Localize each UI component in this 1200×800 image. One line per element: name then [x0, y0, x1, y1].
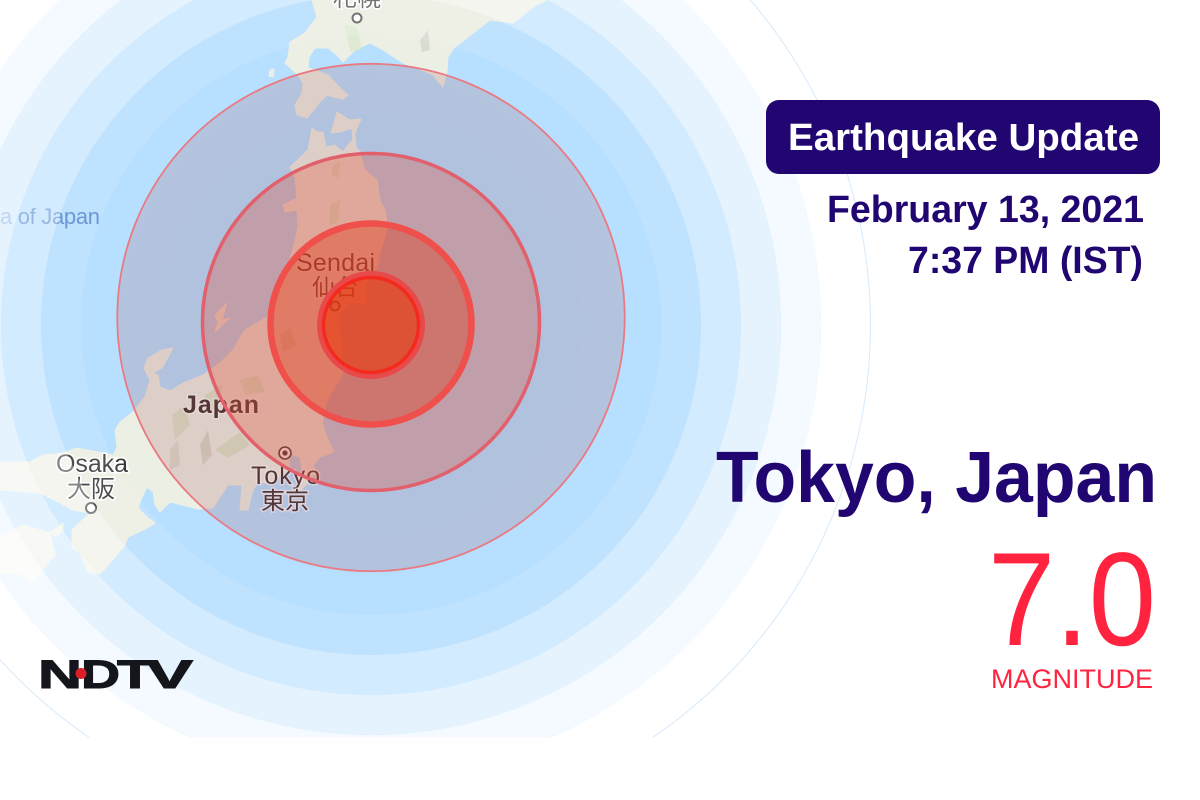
map label: Japan: Japan — [183, 391, 259, 419]
NDTV logo: V — [146, 653, 194, 697]
red circle: epicentre — [320, 274, 422, 376]
date and time: 7:37 PM (IST) — [908, 240, 1143, 282]
sea background — [0, 0, 821, 738]
map: landmass of Japan — [0, 0, 547, 583]
red circle: third intensity zone — [270, 224, 472, 424]
map label: Sendai — [296, 249, 375, 310]
map with seismic rings — [0, 0, 871, 738]
map label: Tokyo: 東京 — [261, 488, 309, 515]
map label: Sendai: 仙台 — [312, 274, 358, 300]
map label: Sea of Japan: a of Japan — [0, 204, 100, 229]
NDTV logo: D — [81, 653, 120, 697]
location heading: Tokyo, Japan — [716, 438, 1157, 518]
badge: Earthquake Update — [766, 100, 1160, 174]
badge: Earthquake Update: Earthquake Update — [788, 117, 1139, 159]
red circle: outer intensity zone — [117, 64, 625, 571]
NDTV logo — [38, 653, 194, 697]
red circle: second intensity zone — [202, 154, 540, 490]
map label: Tokyo — [251, 447, 320, 515]
date and time — [827, 189, 1144, 282]
map label: Sapporo — [333, 0, 381, 22]
map label: Tokyo: Tokyo — [251, 462, 320, 490]
date and time: February 13, 2021 — [827, 189, 1144, 231]
NDTV logo: T — [117, 653, 153, 697]
outermost thin ring — [0, 0, 870, 737]
magnitude value: 7.0 — [988, 526, 1156, 674]
map label: Osaka — [56, 450, 128, 513]
map label: Sendai: Sendai — [296, 249, 375, 277]
map label: Osaka: Osaka — [56, 450, 128, 478]
magnitude label: MAGNITUDE — [991, 664, 1153, 694]
map label: Osaka: 大阪 — [67, 476, 115, 503]
map: parks and mountain patches — [170, 25, 430, 470]
outer fading rings — [0, 0, 801, 755]
NDTV logo: N — [38, 653, 82, 697]
